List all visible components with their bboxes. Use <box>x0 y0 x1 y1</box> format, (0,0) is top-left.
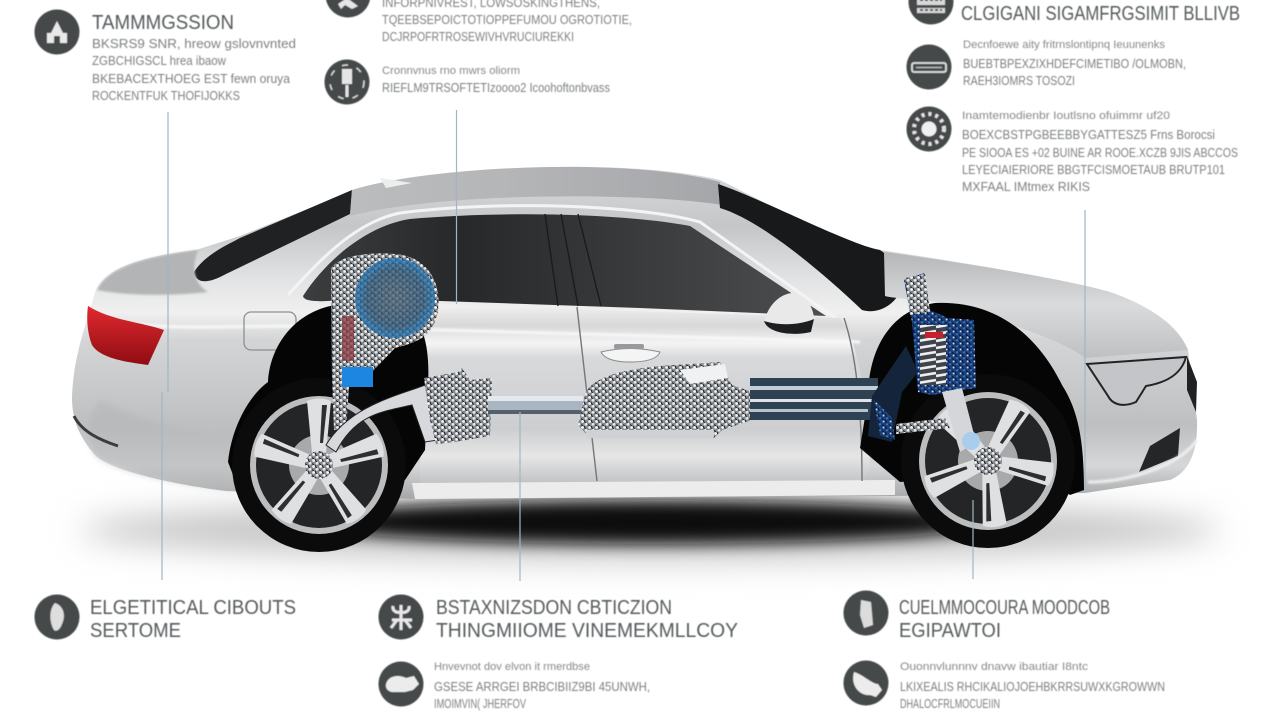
text block: gearbox: LKIXEALIS RHCIKALIOJOEHBKRRSUWXKGROWWN <box>900 679 1165 694</box>
text block: sun gear: BOEXCBSTPGBEEBBYGATTESZ5 Frns Borocsi <box>962 127 1215 142</box>
rear quarter shade <box>88 400 250 490</box>
icon: axle <box>378 594 424 640</box>
text block: top centre upper <box>382 0 632 44</box>
icon: transmission <box>34 10 80 54</box>
icon: electrical <box>34 594 80 640</box>
text block: top centre lower: Cronnvnus rno mwrs oliorm <box>382 65 520 77</box>
icon: engine block <box>378 662 424 706</box>
text block: top centre upper: TQEEBSEPOICTOTIOPPEFUMOU OGROTIOTIE, <box>382 12 632 27</box>
ground shadow <box>80 500 1220 560</box>
trunk lid <box>97 250 208 295</box>
icon: connector bar <box>906 44 952 90</box>
text block: top centre upper: DCJRPOFRTROSEWIVHVRUCIUREKKI <box>382 29 574 44</box>
door mirror <box>764 293 814 334</box>
car body shell <box>72 167 1197 499</box>
window pillars and door seams <box>545 214 862 481</box>
rear window band <box>194 190 352 281</box>
front wheel <box>901 374 1075 548</box>
text block: connector: BUEBTBPEXZIXHDEFCIMETIBO /OLMOBN, <box>963 56 1186 71</box>
icon: spring <box>844 590 888 636</box>
rear suspension and brake assembly <box>326 253 439 452</box>
text block: engine: Hnvevnot dov elvon it rmerdbse <box>434 661 590 673</box>
text block: connector <box>963 39 1186 88</box>
text block: sun gear: MXFAAL IMtmex RIKIS <box>962 179 1090 194</box>
icon: cut-off gear <box>326 0 370 18</box>
text block: transmission <box>92 36 296 103</box>
door panels <box>420 304 870 483</box>
drivetrain cutaway <box>326 253 980 452</box>
central transmission <box>578 362 752 438</box>
prop shaft <box>488 396 583 414</box>
heading: electrical circuits: ELGETITICAL CIBOUTS <box>90 597 296 619</box>
heading: bottom right: EGIPAWTOI <box>899 620 1001 642</box>
roof panel <box>350 167 722 216</box>
text block: transmission: BKEBACEXTHOEG EST fewn oruya <box>92 71 291 86</box>
icon: piston <box>324 60 370 104</box>
icon: sun gear <box>906 106 952 152</box>
heading: bottom right <box>899 597 1110 642</box>
text block: sun gear: LEYECIAIERIORE BBGTFCISMOETAUB BRUTP101 <box>962 162 1225 177</box>
text block: gearbox: Ouonnvlunnnv dnavw ibautiar I8ntc <box>900 661 1089 673</box>
callout: top centre upper <box>326 0 632 44</box>
heading: bottom centre <box>436 597 738 642</box>
heading: bottom right: CUELMMOCOURA MOODCOB <box>899 597 1110 619</box>
windscreen <box>718 184 904 311</box>
antenna fin <box>380 178 412 188</box>
tail light <box>87 306 164 365</box>
front suspension strut <box>868 273 980 452</box>
forward driveshafts <box>750 378 878 420</box>
beltline highlight <box>110 322 860 342</box>
text block: gearbox: DHALOCFRLMOCUEIIN <box>900 696 1000 711</box>
sill highlight <box>412 480 895 499</box>
headlight <box>1087 357 1186 405</box>
text block: transmission: BKSRS9 SNR, hreow gslovnvnted <box>92 36 296 51</box>
fuel flap <box>244 312 296 350</box>
icon: gearbox <box>844 660 888 706</box>
heading: transmission: TAMMMGSSION <box>92 12 234 34</box>
text block: top centre lower: RIEFLM9TRSOFTETIzoooo2 Icoohoftonbvass <box>382 80 610 95</box>
rear wheel <box>232 378 406 552</box>
front wheel arch <box>860 303 1084 495</box>
heading: bottom centre: BSTAXNIZSDON CBTICZION <box>436 597 672 619</box>
text block: top centre lower <box>382 65 610 95</box>
text block: transmission: ZGBCHIGSCL hrea ibaow <box>92 53 227 68</box>
front bumper lip <box>1088 440 1197 482</box>
text block: transmission: ROCKENTFUK THOFIJOKKS <box>92 88 240 103</box>
text block: sun gear <box>962 110 1238 194</box>
text block: connector: Decnfoewe aity fritrnslontipnq Ieuunenks <box>963 39 1165 51</box>
side windows <box>303 214 826 316</box>
icon: battery module <box>908 0 954 24</box>
callout: bottom right <box>844 590 1165 711</box>
hood <box>884 252 1188 358</box>
text block: sun gear: Inamtemodienbr Ioutlsno ofuimmr uf20 <box>962 110 1170 122</box>
leader lines <box>162 110 1085 581</box>
callout: electrical circuits <box>34 594 296 642</box>
rear bumper vent <box>74 416 118 446</box>
text block: connector: RAEH3IOMRS TOSOZI <box>963 73 1075 88</box>
text block: engine <box>434 661 650 711</box>
callout: top centre lower <box>324 60 610 104</box>
text block: gearbox <box>900 661 1165 711</box>
front bumper vent <box>1139 428 1180 472</box>
callout: bottom centre <box>378 594 738 711</box>
upper door frame highlight <box>288 206 838 320</box>
callout: top right <box>906 0 1240 194</box>
rear wheel arch <box>228 305 428 480</box>
text block: engine: GSESE ARRGEI BRBCIBIIZ9BI 45UNWH, <box>434 679 650 694</box>
text block: engine: IMOIMVIN( JHERFOV <box>434 696 526 711</box>
car illustration <box>72 167 1197 552</box>
grille <box>1187 356 1197 412</box>
heading: bottom centre: THINGMIIOME VINEMEKMLLCOY <box>436 620 738 642</box>
heading: electrical circuits: SERTOME <box>90 620 181 642</box>
callout: transmission <box>34 10 296 103</box>
heading: electrical circuits <box>90 597 296 642</box>
door handle <box>601 344 660 362</box>
rear differential <box>424 368 492 444</box>
